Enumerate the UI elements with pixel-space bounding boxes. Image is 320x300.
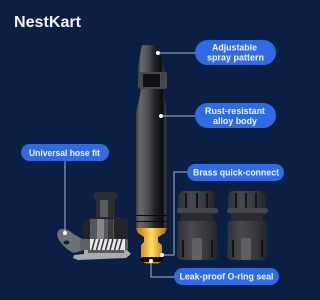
adapter ear [57,229,84,253]
adapter top cap [93,192,118,217]
callout: rust-resistant alloy body [159,103,276,128]
callout: leak-proof O-ring seal: Leak-proof O-ring seal [180,272,274,282]
adapter base [73,250,131,260]
product: spray nozzle [136,45,167,264]
adjustment ring [138,72,167,89]
metal clamp [80,239,128,250]
callout: leak-proof O-ring seal [149,259,279,285]
O-ring [141,257,163,262]
brass connector [136,228,167,258]
callout: universal hose fit [21,144,109,235]
adapter housing [83,217,128,242]
nozzle body [136,89,167,228]
product: left coupler [177,191,218,260]
callout: adjustable spray pattern: Adjustable [212,42,257,52]
callout: brass quick-connect [160,164,284,257]
product: tap adapter [57,192,131,260]
title: brand logo: NestKart [14,14,81,31]
callout: brass quick-connect: Brass quick-connect [193,168,279,178]
callout: adjustable spray pattern: spray pattern [207,52,264,62]
product: right coupler [227,191,268,260]
nozzle tip [138,45,165,72]
callout: universal hose fit: Universal hose fit [29,148,100,158]
callout: rust-resistant alloy body: Rust-resistant [205,106,265,116]
callout: adjustable spray pattern [156,40,276,65]
callout: rust-resistant alloy body: alloy body [213,116,257,126]
